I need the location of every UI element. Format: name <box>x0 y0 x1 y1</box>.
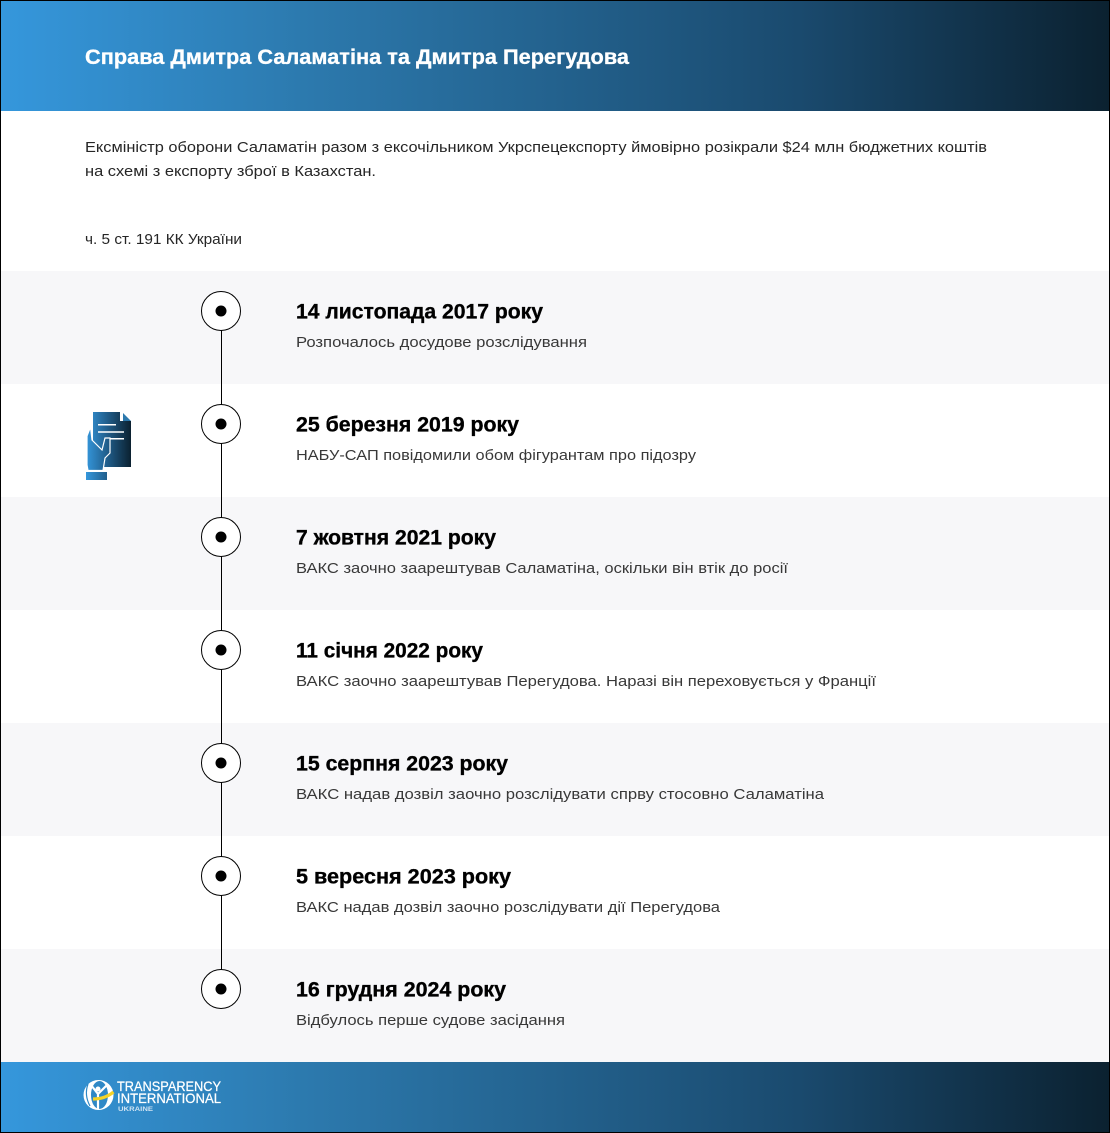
event: 11 січня 2022: ВАКС заочно заарештував Перегудова. Наразі він переховується у Франції <box>296 673 877 690</box>
logo wordmark <box>117 1078 222 1113</box>
logo: Transparency International Ukraine <box>84 1078 222 1113</box>
event: 5 вересня 2023 <box>202 856 721 916</box>
logo emblem <box>84 1080 114 1110</box>
event: 16 грудня 2024: Відбулось перше судове засідання <box>296 1012 565 1029</box>
header banner <box>1 1 1109 111</box>
event: 25 березня 2019 <box>202 404 697 464</box>
timeline line <box>220 311 222 989</box>
event: 15 серпня 2023: 15 серпня 2023 року <box>296 752 508 776</box>
event: 5 вересня 2023: 5 вересня 2023 року <box>296 866 511 888</box>
document lines <box>98 425 124 439</box>
event: 7 жовтня 2021: ВАКС заочно заарештував Саламатіна, оскільки він втік до росії <box>296 560 789 577</box>
event: 11 січня 2022: 11 січня 2022 року <box>296 640 483 662</box>
hand <box>87 427 110 470</box>
event: 14 листопада 2017 <box>202 292 587 351</box>
event: 11 січня 2022 <box>202 630 877 690</box>
event: 14 листопада 2017: 14 листопада 2017 року <box>296 300 543 324</box>
cuff <box>86 472 107 480</box>
description: на схемі з експорту зброї в Казахстан. <box>85 163 376 180</box>
event: 25 березня 2019: 25 березня 2019 року <box>296 414 519 436</box>
title: Справа Дмитра Саламатіна та Дмитра Перегудова <box>85 46 629 69</box>
icon: hand holding document <box>86 412 131 480</box>
timeline row backgrounds <box>1 271 1109 1062</box>
document fold <box>123 413 131 421</box>
event: 16 грудня 2024: 16 грудня 2024 року <box>296 978 506 1002</box>
logo wordmark: TRANSPARENCY <box>117 1078 222 1094</box>
event: 15 серпня 2023 <box>202 744 825 803</box>
footer banner <box>1 1062 1109 1132</box>
legal article: ч. 5 ст. 191 КК України <box>85 231 242 248</box>
event: 5 вересня 2023: ВАКС надав дозвіл заочно розслідувати дії Перегудова <box>296 899 721 916</box>
document sheet <box>93 412 131 467</box>
logo wordmark: UKRAINE <box>118 1106 154 1113</box>
event: 16 грудня 2024 <box>202 970 565 1029</box>
event: 7 жовтня 2021 <box>202 518 789 577</box>
event: 7 жовтня 2021: 7 жовтня 2021 року <box>296 526 496 550</box>
description: Ексміністр оборони Саламатін разом з ексочільником Укрспецекспорту ймовірно розікрали $24 млн бюджетних коштів <box>85 139 987 156</box>
event: 14 листопада 2017: Розпочалось досудове розслідування <box>296 334 587 351</box>
event: 25 березня 2019: НАБУ-САП повідомили обом фігурантам про підозру <box>296 447 697 464</box>
event: 15 серпня 2023: ВАКС надав дозвіл заочно розслідувати спрву стосовно Саламатіна <box>296 786 825 803</box>
description <box>85 139 987 180</box>
logo wordmark: INTERNATIONAL <box>117 1090 221 1106</box>
